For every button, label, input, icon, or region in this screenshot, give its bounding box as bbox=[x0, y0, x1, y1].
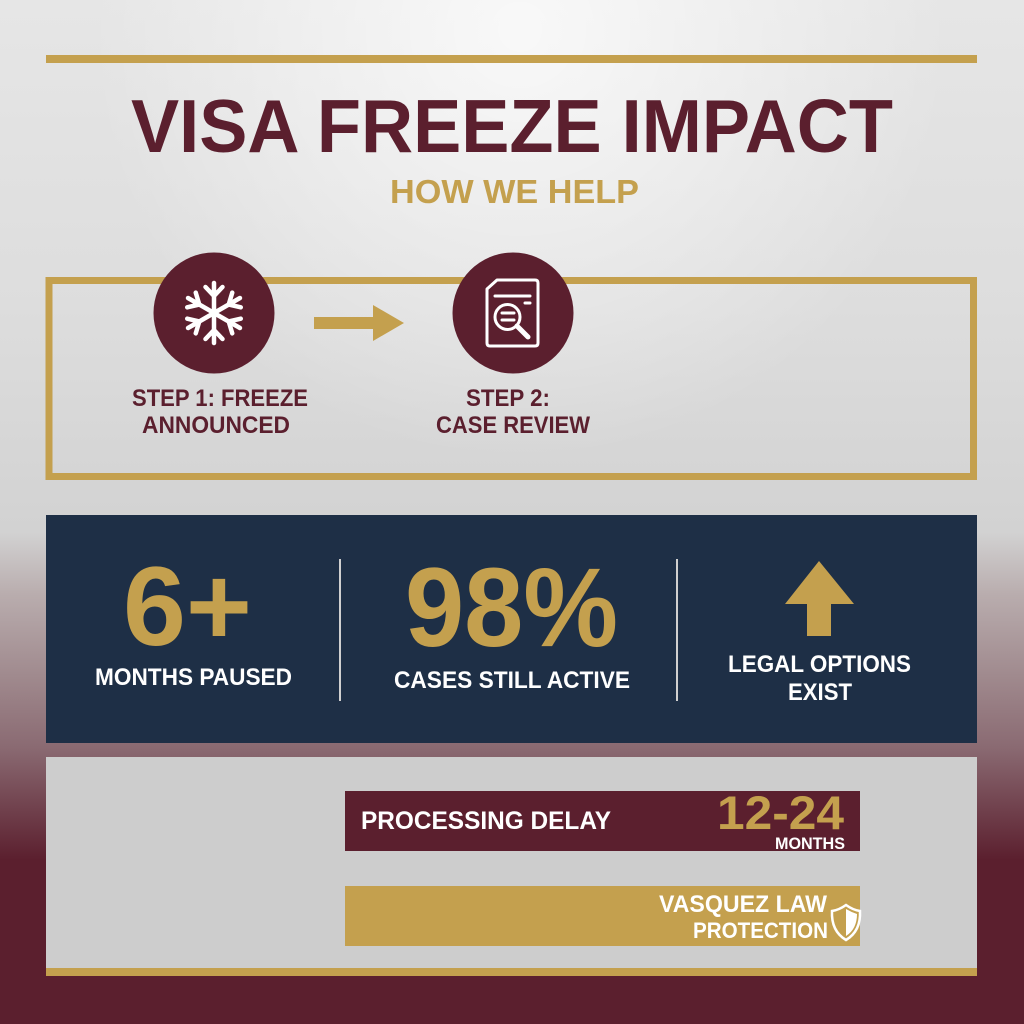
step 2 bbox=[436, 252, 590, 439]
stat: cases still active: CASES STILL ACTIVE bbox=[394, 667, 630, 694]
step 2 label: STEP 2: bbox=[466, 385, 550, 412]
stat: cases still active: 98% bbox=[405, 545, 618, 670]
icon: up arrow bbox=[785, 561, 854, 636]
arrow bbox=[314, 305, 404, 341]
step 2 label bbox=[436, 385, 590, 439]
bar: processing delay bbox=[345, 786, 860, 853]
top gold rule bbox=[46, 55, 977, 63]
bar: Vasquez Law protection: VASQUEZ LAW bbox=[659, 891, 827, 918]
stat: months paused: MONTHS PAUSED bbox=[95, 664, 292, 691]
stat: legal options: LEGAL OPTIONS bbox=[728, 651, 911, 678]
panel: key statistics bbox=[46, 515, 977, 743]
step 1 label: STEP 1: FREEZE bbox=[132, 385, 308, 412]
bar: processing delay: PROCESSING DELAY bbox=[361, 807, 611, 835]
step 2 label: CASE REVIEW bbox=[436, 412, 590, 439]
stat: legal options bbox=[728, 561, 911, 706]
divider bbox=[676, 559, 678, 701]
step 1 label bbox=[132, 385, 308, 439]
subtitle: HOW WE HELP bbox=[390, 173, 639, 210]
bar: processing delay: MONTHS bbox=[775, 834, 845, 853]
panel: process steps bbox=[49, 252, 974, 476]
bar: Vasquez Law protection: PROTECTION bbox=[693, 918, 828, 943]
divider bbox=[339, 559, 341, 701]
panel: comparison bbox=[46, 757, 977, 976]
process frame bbox=[49, 280, 974, 476]
bottom gold rule bbox=[46, 968, 977, 976]
bar: Vasquez Law protection bbox=[345, 886, 860, 946]
comparison background bbox=[46, 757, 977, 969]
title: VISA FREEZE IMPACT bbox=[131, 84, 893, 168]
step 1 label: ANNOUNCED bbox=[142, 412, 290, 439]
stat: months paused bbox=[95, 544, 292, 691]
step 1 bbox=[132, 252, 308, 439]
stat: legal options: EXIST bbox=[788, 679, 852, 706]
icon: snowflake bbox=[154, 252, 274, 374]
icon: shield bbox=[832, 905, 860, 940]
stats background bbox=[46, 515, 977, 743]
stat: months paused: 6+ bbox=[123, 544, 252, 669]
icon: document with magnifier bbox=[452, 252, 574, 374]
bar: processing delay: 12-24 bbox=[717, 786, 844, 839]
